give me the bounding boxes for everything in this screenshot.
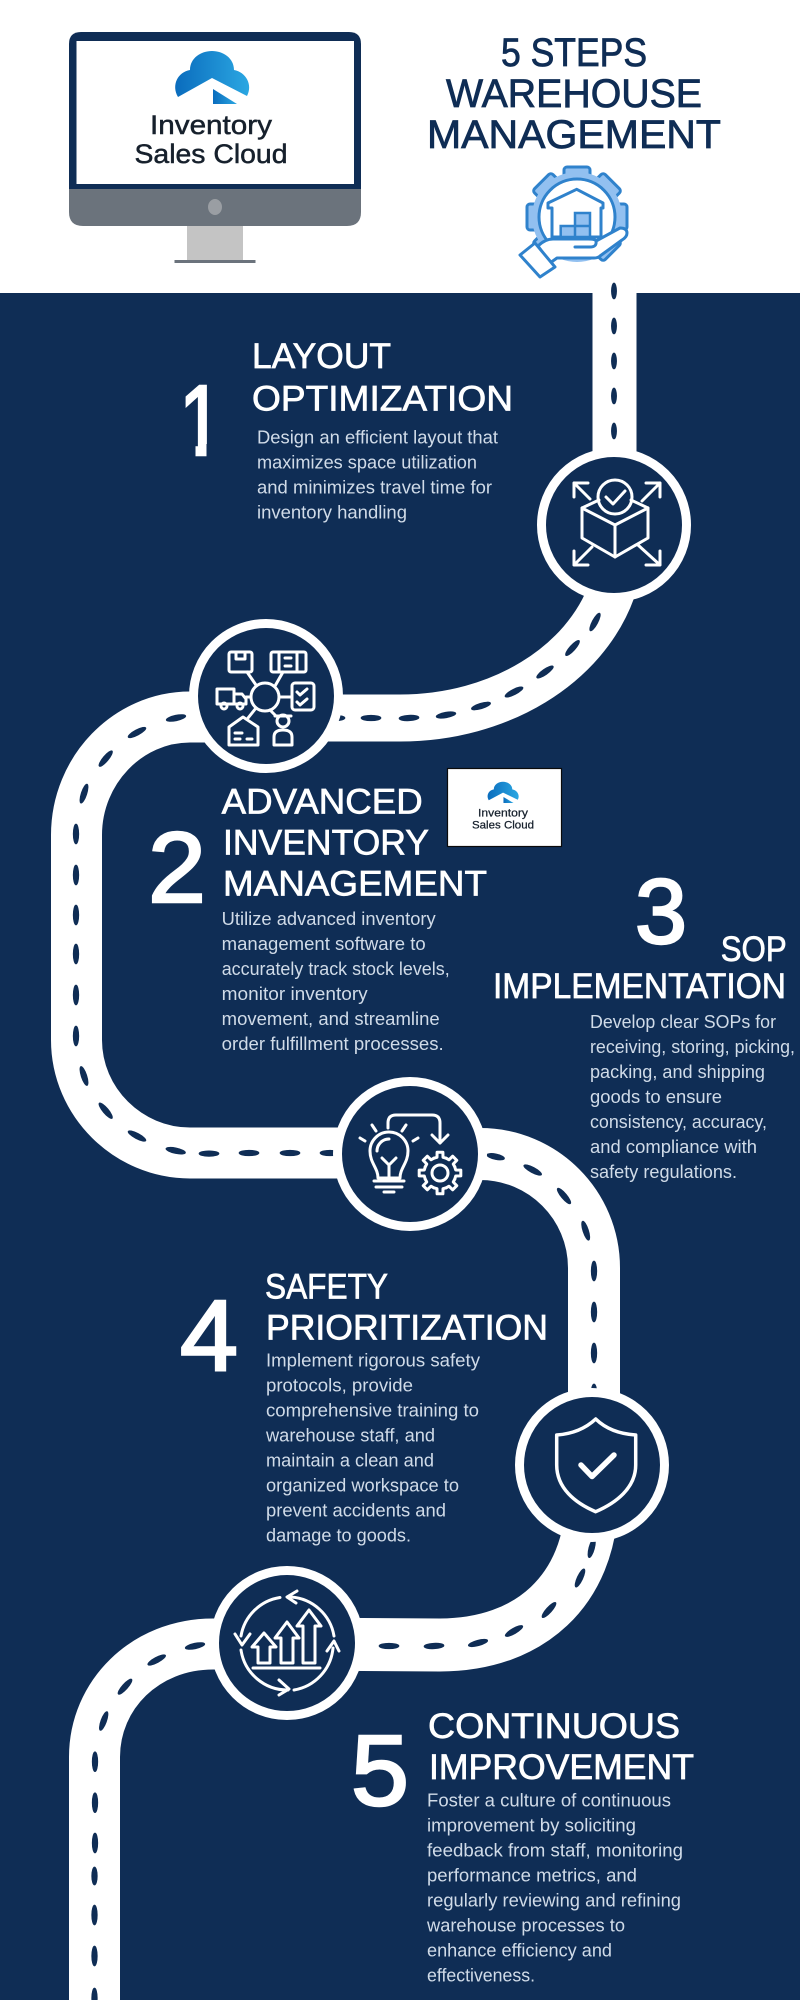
- step 3 body: goods to ensure: [590, 1087, 722, 1107]
- step 5 body: improvement by soliciting: [427, 1816, 636, 1836]
- icon: warehouse in gear held by hand: [520, 167, 627, 277]
- step 5 body: effectiveness.: [427, 1966, 535, 1986]
- step 2 body: [222, 909, 450, 1054]
- title: MANAGEMENT: [427, 113, 721, 157]
- step 4 body: protocols, provide: [266, 1376, 413, 1396]
- step 3 text: [493, 861, 795, 1182]
- step 4 number: 4: [180, 1280, 238, 1392]
- step 5 body: warehouse processes to: [426, 1916, 625, 1936]
- step 2 text: [148, 782, 487, 1054]
- icon: cloud logo: [175, 51, 249, 104]
- step 3 body: safety regulations.: [590, 1162, 737, 1182]
- step 5 heading: CONTINUOUS: [428, 1707, 680, 1746]
- step 2 body: accurately track stock levels,: [222, 959, 450, 979]
- step 3 icon: light bulb to gear: [338, 1082, 482, 1226]
- step 4 body: prevent accidents and: [266, 1501, 446, 1521]
- step 3 body: packing, and shipping: [590, 1062, 765, 1082]
- header background: [0, 0, 800, 293]
- title: 5 STEPS: [501, 31, 647, 75]
- step 3 body: consistency, accuracy,: [590, 1112, 767, 1132]
- step 4 body: [265, 1351, 480, 1546]
- step 2 heading: [222, 782, 487, 903]
- step 3 heading: [493, 930, 787, 1006]
- step 1 body: and minimizes travel time for: [257, 477, 492, 497]
- logo text: Inventory: [150, 110, 273, 140]
- step 4 body: comprehensive training to: [266, 1401, 479, 1421]
- step 2 body: monitor inventory: [222, 984, 368, 1004]
- step 4 icon: shield with check: [520, 1392, 664, 1538]
- logo text: [134, 110, 288, 169]
- step 1 icon: box with expanding arrows: [542, 452, 686, 598]
- computer monitor with logo: [69, 32, 361, 263]
- step 3 heading: SOP: [721, 930, 787, 969]
- step 2 body: order fulfillment processes.: [222, 1034, 444, 1054]
- mini logo text: [472, 808, 534, 831]
- road surface: [76, 270, 614, 2000]
- road centre dashes: [73, 283, 617, 2000]
- step 5 body: regularly reviewing and refining: [427, 1891, 681, 1911]
- small logo card: [448, 768, 562, 846]
- step 4 text: [180, 1268, 548, 1546]
- step 1 body: maximizes space utilization: [257, 452, 477, 472]
- title: [427, 31, 721, 157]
- step 5 body: performance metrics, and: [427, 1866, 637, 1886]
- step 3 body: and compliance with: [590, 1137, 757, 1157]
- road: winding white path with dashed centre line: [73, 270, 617, 2000]
- step 3 body: [590, 1012, 795, 1182]
- step 4 heading: PRIORITIZATION: [266, 1309, 548, 1348]
- step 1 heading: [252, 337, 513, 419]
- step 5 body: [426, 1791, 683, 1986]
- step 1 body: Design an efficient layout that: [257, 427, 498, 447]
- step 4 body: warehouse staff, and: [265, 1426, 435, 1446]
- step 5 heading: [428, 1707, 694, 1787]
- monitor stand: [174, 224, 256, 263]
- step 2 body: management software to: [222, 934, 426, 954]
- step 5 text: [351, 1707, 694, 1986]
- step 1 body: inventory handling: [257, 502, 407, 522]
- step 2 heading: MANAGEMENT: [223, 864, 487, 903]
- step 2 number: 2: [148, 812, 206, 924]
- step 5 icon: growth arrows in cycle: [214, 1570, 360, 1716]
- icon: mini cloud logo: [488, 782, 519, 803]
- step 1 number: 1: [179, 365, 223, 477]
- step 3 body: receiving, storing, picking,: [590, 1037, 795, 1057]
- step 2 body: movement, and streamline: [222, 1009, 440, 1029]
- step 4 heading: SAFETY: [265, 1268, 388, 1307]
- step 1 heading: OPTIMIZATION: [252, 380, 513, 419]
- logo text: Sales Cloud: [134, 139, 288, 169]
- mini logo text: Inventory: [478, 808, 529, 820]
- step 4 body: maintain a clean and: [266, 1451, 434, 1471]
- step 4 body: Implement rigorous safety: [266, 1351, 480, 1371]
- step 4 body: damage to goods.: [266, 1526, 411, 1546]
- step 3 number: 3: [635, 861, 687, 963]
- step 1 body: [257, 427, 498, 522]
- monitor body: [69, 32, 361, 226]
- step 5 body: Foster a culture of continuous: [427, 1791, 671, 1811]
- step 4 heading: [265, 1268, 548, 1348]
- step 3 heading: IMPLEMENTATION: [493, 967, 786, 1006]
- mini logo text: Sales Cloud: [472, 819, 534, 831]
- step 4 body: organized workspace to: [266, 1476, 459, 1496]
- title: WAREHOUSE: [446, 72, 702, 116]
- step 5 body: enhance efficiency and: [427, 1941, 612, 1961]
- step 2 heading: ADVANCED: [222, 782, 423, 821]
- step 3 body: Develop clear SOPs for: [590, 1012, 776, 1032]
- step 5 heading: IMPROVEMENT: [429, 1748, 694, 1787]
- step 1 text: [176, 337, 513, 522]
- step 1 heading: LAYOUT: [252, 337, 391, 376]
- step 2 icon: inventory network hub: [194, 624, 338, 768]
- step 2 body: Utilize advanced inventory: [222, 909, 436, 929]
- step 2 heading: INVENTORY: [223, 823, 429, 862]
- step 5 number: 5: [351, 1715, 409, 1827]
- step 5 body: feedback from staff, monitoring: [427, 1841, 683, 1861]
